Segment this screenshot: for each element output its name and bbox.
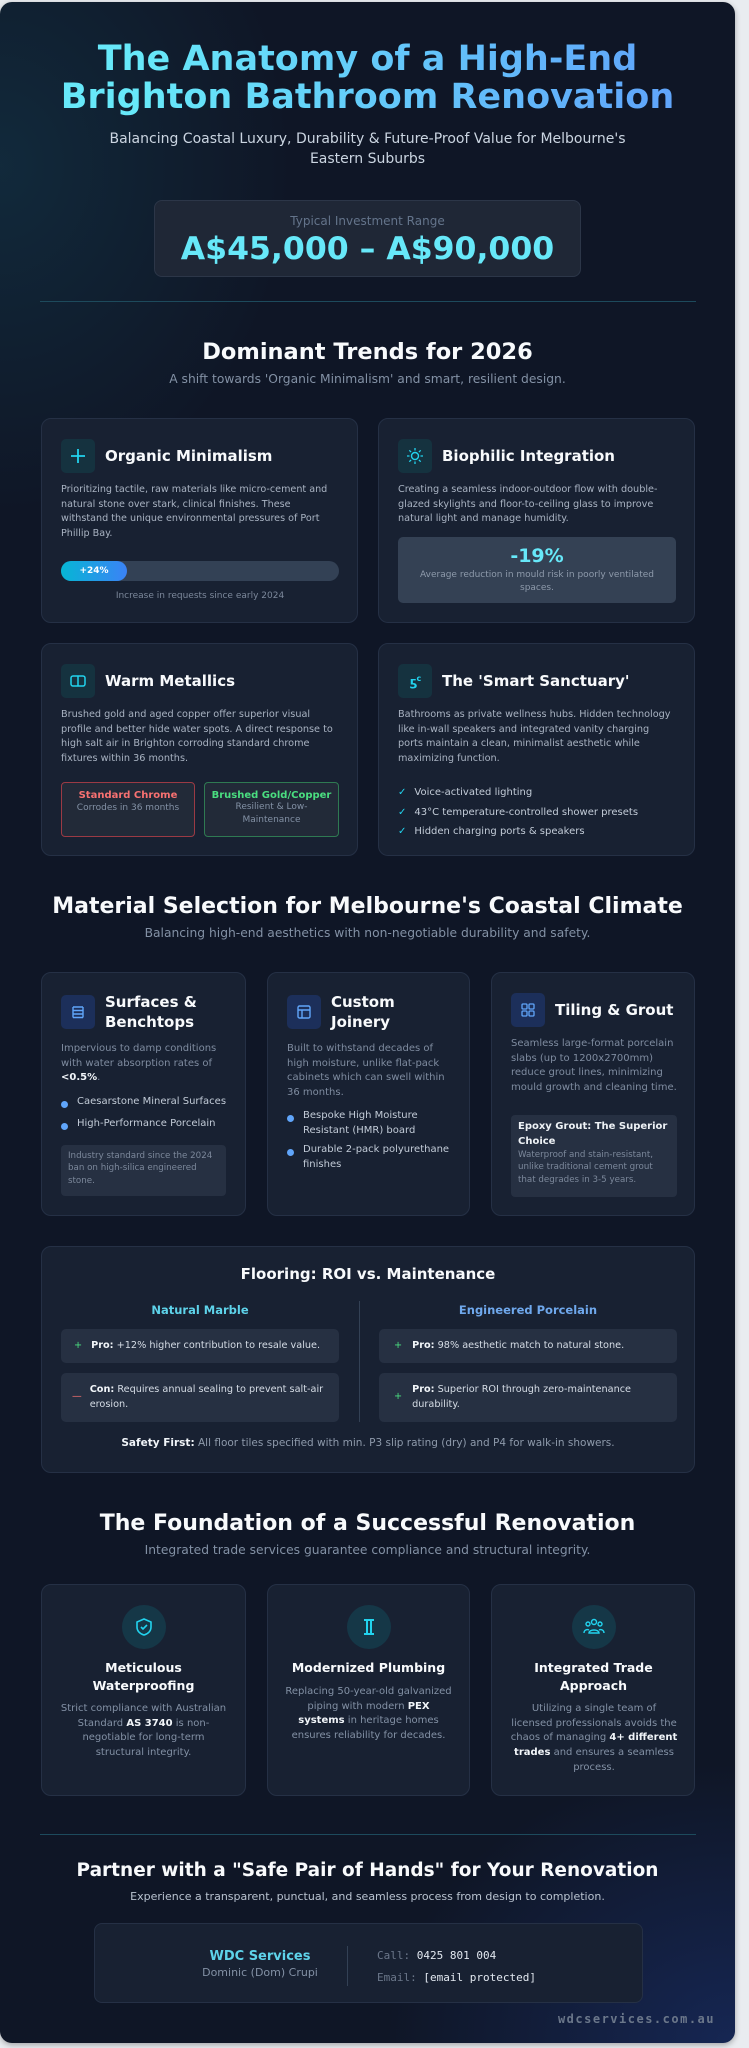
icon: grid xyxy=(511,993,545,1027)
panel: tiling xyxy=(491,972,695,1216)
card title: Meticulous xyxy=(105,1660,182,1675)
subtitle: Balancing Coastal Luxury, Durability & Future-Proof Value for Melbourne's Eastern Suburbs xyxy=(109,131,626,167)
card title: Tiling & Grout xyxy=(555,1001,673,1019)
marble con xyxy=(61,1373,339,1422)
icon: sun xyxy=(398,439,432,473)
compare: gold xyxy=(204,782,339,837)
price label: Typical Investment Range xyxy=(290,214,445,228)
card text: Prioritizing tactile, raw materials like micro-cement and xyxy=(61,484,327,495)
card title: Joinery xyxy=(331,1013,390,1031)
card text xyxy=(61,484,327,539)
bullets xyxy=(287,1110,449,1170)
title: Brighton Bathroom Renovation xyxy=(61,77,674,117)
card title: Custom xyxy=(331,993,395,1011)
card text: Strict compliance with Australian Standard AS 3740 is non-negotiable for long-term structural integrity. xyxy=(61,1703,226,1758)
price box xyxy=(154,200,581,277)
porcelain pro 2: + xyxy=(394,1391,402,1402)
epoxy callout: Waterproof and stain-resistant, unlike traditional cement grout that degrades in 3-5 years. xyxy=(518,1150,653,1185)
icon: shield xyxy=(122,1605,166,1649)
company name: Dominic (Dom) Crupi xyxy=(202,1966,318,1979)
card title: The 'Smart Sanctuary' xyxy=(442,672,629,690)
icon: plus xyxy=(61,439,95,473)
bullets xyxy=(61,1096,226,1130)
card text xyxy=(511,1703,678,1773)
heading: foundation: The Foundation of a Successful Renovation xyxy=(100,1511,635,1536)
stat box: -19% xyxy=(510,545,564,567)
marble pro: Pro: +12% higher contribution to resale value. xyxy=(91,1340,320,1351)
panel: smart sanctuary xyxy=(378,643,695,856)
icon: sound: ƽc xyxy=(410,674,420,688)
flooring title: Flooring: ROI vs. Maintenance xyxy=(241,1265,495,1283)
column: marble heading: Natural Marble xyxy=(151,1303,249,1317)
column: porcelain heading: Engineered Porcelain xyxy=(459,1303,597,1317)
bullets: Durable 2-pack polyurethane finishes xyxy=(303,1144,449,1170)
card title: Integrated Trade xyxy=(534,1660,653,1675)
title xyxy=(0,40,735,116)
card text: Utilizing a single team of xyxy=(532,1703,656,1714)
footer url: wdcservices.com.au xyxy=(558,2012,715,2026)
bullets: Caesarstone Mineral Surfaces xyxy=(77,1096,226,1107)
subheading: trends: A shift towards 'Organic Minimalism' and smart, resilient design. xyxy=(169,372,566,386)
stat box: Average reduction in mould risk in poorly ventilated spaces. xyxy=(420,570,654,592)
price value: A$45,000 – A$90,000 xyxy=(181,231,554,267)
contact details xyxy=(377,1949,536,1984)
compare: chrome: Corrodes in 36 months xyxy=(77,803,179,813)
company name: WDC Services xyxy=(210,1949,310,1964)
checklist: ✓ Voice-activated lighting xyxy=(398,787,532,798)
icon: metal xyxy=(61,664,95,698)
subheading: materials: Balancing high-end aesthetics with non-negotiable durability and safety. xyxy=(145,926,590,940)
porcelain pro 2 xyxy=(379,1373,677,1422)
card text: Seamless large-format porcelain slabs (up to 1200x2700mm) reduce grout lines, minimizing mould growth and cleaning time. xyxy=(511,1038,677,1093)
safety note: Safety First: All floor tiles specified with min. P3 slip rating (dry) and P4 for walk-in showers. xyxy=(121,1437,615,1449)
compare: chrome: Standard Chrome xyxy=(79,790,177,801)
checklist xyxy=(398,787,638,837)
card text: Bathrooms as private wellness hubs. Hidden technology like in-wall speakers and integrated vanity charging ports maintain a clean, minimalist aesthetic while maximizing function. xyxy=(398,709,671,764)
note box: Industry standard since the 2024 ban on high-silica engineered stone. xyxy=(68,1151,212,1186)
marble con: — xyxy=(72,1391,82,1402)
icon: cabinet xyxy=(287,995,321,1029)
card text: Impervious to damp conditions with water absorption rates of <0.5%. xyxy=(61,1043,216,1083)
note box xyxy=(61,1145,226,1196)
icon: team xyxy=(572,1605,616,1649)
icon: sound xyxy=(398,664,432,698)
card title xyxy=(330,993,395,1031)
progress bar: +24% xyxy=(79,566,109,576)
card title xyxy=(105,993,197,1031)
panel: warm metallics xyxy=(41,643,358,856)
card text: licensed professionals avoids the xyxy=(511,1718,677,1729)
compare: gold: Brushed Gold/Copper xyxy=(212,790,331,801)
checklist: ✓ Hidden charging ports & speakers xyxy=(398,826,585,837)
card text: withstand the unique environmental pressures of Port xyxy=(61,513,319,524)
subheading: partner: Experience a transparent, punctual, and seamless process from design to completion. xyxy=(130,1890,605,1903)
card title: Approach xyxy=(560,1678,627,1692)
icon: layers xyxy=(61,995,95,1029)
card title: Biophilic Integration xyxy=(442,447,615,465)
card text: process. xyxy=(573,1762,615,1773)
panel: surfaces xyxy=(41,972,246,1216)
card title xyxy=(534,1660,653,1692)
panel: flooring xyxy=(41,1246,695,1473)
card text: Replacing 50-year-old galvanized piping with modern PEX systems in heritage homes ensures reliability for decades. xyxy=(285,1686,452,1741)
marble pro: + xyxy=(74,1340,82,1351)
card text: Phillip Bay. xyxy=(61,528,112,539)
stat box xyxy=(398,537,676,603)
panel: integrated trades xyxy=(491,1584,695,1796)
card text: Built to withstand decades of high moisture, unlike flat-pack cabinets which can swell within 36 months. xyxy=(287,1043,445,1098)
card text: chaos of managing 4+ different xyxy=(511,1732,677,1743)
compare: gold: Maintenance xyxy=(243,814,300,824)
card text: Brushed gold and aged copper offer superior visual profile and better hide water spots. A direct response to high salt air in Brighton corroding standard chrome fixtures within 36 months. xyxy=(61,709,333,764)
panel: joinery xyxy=(267,972,470,1216)
marble con: Con: Requires annual sealing to prevent salt-air erosion. xyxy=(90,1384,323,1410)
bullets: Bespoke High Moisture Resistant (HMR) board xyxy=(303,1110,418,1136)
subheading: foundation: Integrated trade services guarantee compliance and structural integrity. xyxy=(145,1543,590,1557)
porcelain pro 1: + xyxy=(394,1340,402,1351)
bullets: High-Performance Porcelain xyxy=(77,1118,216,1129)
card title xyxy=(93,1660,194,1692)
porcelain pro 2: Pro: Superior ROI through zero-maintenance durability. xyxy=(412,1384,631,1410)
heading: partner: Partner with a "Safe Pair of Hands" for Your Renovation xyxy=(77,1860,658,1881)
card title: Warm Metallics xyxy=(105,672,235,690)
card text: Creating a seamless indoor-outdoor flow with double-glazed skylights and floor-to-ceiling glass to improve natural light and manage humidity. xyxy=(398,484,658,524)
contact details: Call: 0425 801 004 xyxy=(377,1949,496,1962)
card title: Benchtops xyxy=(105,1013,194,1031)
compare: chrome xyxy=(61,782,195,837)
heading: trends: Dominant Trends for 2026 xyxy=(202,339,533,365)
contact details: Email: [email protected] xyxy=(377,1971,536,1984)
panel: biophilic xyxy=(378,418,695,623)
contact box xyxy=(94,1923,643,2003)
panel: organic minimalism xyxy=(41,418,358,623)
heading: materials: Material Selection for Melbourne's Coastal Climate xyxy=(52,894,683,919)
porcelain pro 1 xyxy=(379,1329,677,1363)
card text: trades and ensures a seamless xyxy=(514,1747,674,1758)
card title: Organic Minimalism xyxy=(105,447,272,465)
porcelain pro 1: Pro: 98% aesthetic match to natural stone. xyxy=(412,1340,624,1351)
card title: Surfaces & xyxy=(105,993,197,1011)
company name xyxy=(202,1949,318,1979)
checklist: ✓ 43°C temperature-controlled shower presets xyxy=(398,807,638,818)
marble pro xyxy=(61,1329,339,1363)
icon: pipe xyxy=(347,1605,391,1649)
progress bar xyxy=(61,561,339,581)
card text: natural stone over stark, clinical finishes. These xyxy=(61,499,291,510)
card title: Modernized Plumbing xyxy=(292,1660,445,1675)
panel: plumbing xyxy=(267,1584,470,1796)
bar caption: Increase in requests since early 2024 xyxy=(116,591,284,601)
epoxy callout: Epoxy Grout: The Superior Choice xyxy=(518,1121,667,1146)
panel: waterproofing xyxy=(41,1584,246,1796)
title: The Anatomy of a High-End xyxy=(98,39,637,79)
compare: gold: Resilient & Low- xyxy=(235,802,308,812)
epoxy callout xyxy=(511,1115,677,1197)
card title: Waterproofing xyxy=(93,1678,194,1692)
